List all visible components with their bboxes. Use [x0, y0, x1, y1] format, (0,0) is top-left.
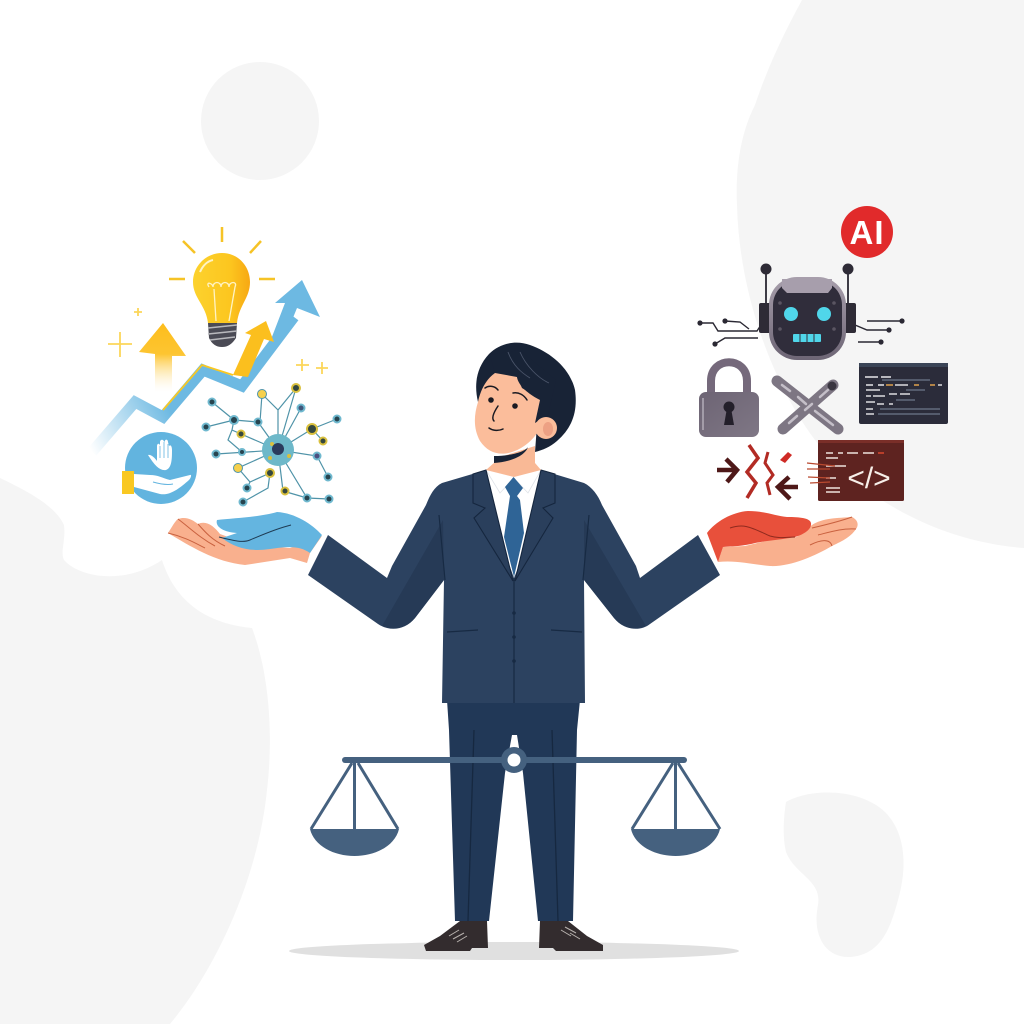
small yellow arrow: [233, 321, 274, 377]
chin shadow: [494, 447, 528, 463]
left shoe: [424, 921, 488, 951]
robot head: [759, 264, 856, 360]
fracture marks and arrows: [717, 445, 798, 499]
red code panel: </>: [847, 462, 891, 495]
ear: [535, 417, 557, 439]
broken chain: [777, 381, 838, 429]
AI badge: [841, 206, 893, 258]
padlock: [699, 362, 759, 437]
necktie: [504, 477, 524, 577]
benefits icon group: [92, 227, 340, 506]
neck: [486, 446, 541, 477]
face: [475, 373, 541, 454]
circuit traces: [697, 318, 905, 347]
yellow up arrow: [139, 323, 186, 392]
left hand: blue and skin: [168, 512, 322, 565]
lapels: [473, 470, 555, 581]
right shoe: [539, 921, 603, 951]
hair highlights: [508, 352, 549, 383]
right hand: red and skin: [707, 511, 858, 566]
shirt and collar: [486, 470, 541, 578]
rising chart arrow: [92, 280, 320, 452]
jacket: [308, 470, 720, 703]
neural network: [202, 384, 340, 506]
sparkles: [108, 308, 328, 374]
face details: [485, 386, 527, 430]
red code panel: [807, 440, 904, 501]
fringe: [490, 350, 556, 423]
light bulb: [169, 227, 275, 347]
AI badge: AI: [850, 214, 884, 251]
helping hand badge: [122, 432, 197, 504]
businessman figure: [308, 343, 720, 951]
ground shadow: [289, 942, 739, 960]
risks icon group: [697, 206, 948, 501]
balance scale: [310, 747, 720, 856]
dark code panel: [859, 363, 948, 424]
hair back: [476, 343, 576, 452]
trousers: [447, 700, 580, 921]
